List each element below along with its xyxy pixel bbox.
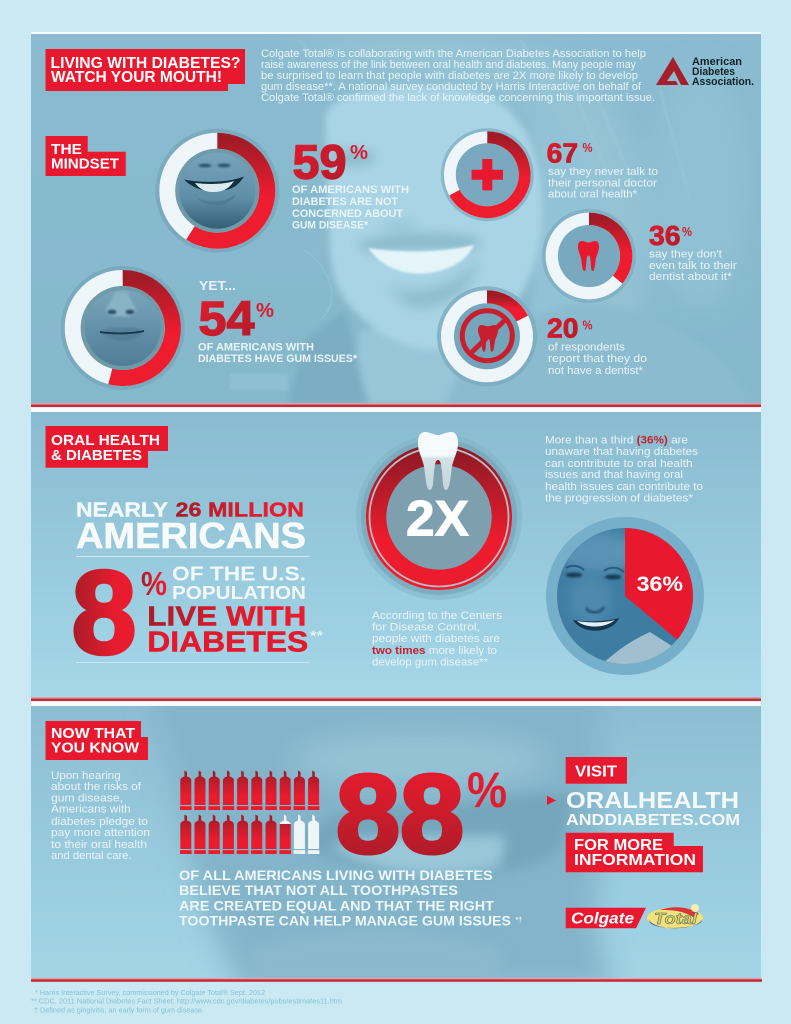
text: of all americans: BELIEVE THAT NOT ALL TOOTHPASTES [179, 882, 458, 898]
stat: 26 million americans [76, 500, 309, 557]
stat: 54 percent: OF AMERICANS WITH [198, 342, 314, 354]
stat: 8 percent live with diabetes: POPULATION [172, 582, 306, 603]
badge: 2X with tooth [356, 432, 522, 600]
text: more than a third: can contribute to oral health [545, 458, 693, 470]
panel: oral health and diabetes [31, 412, 761, 698]
footnotes: † Defined as gingivitis, an early form of gum disease. [34, 1006, 204, 1015]
text: according to the CDC: According to the Centers [372, 610, 502, 622]
icon: tooth [578, 241, 599, 271]
text: according to the CDC: two times more likely to [372, 645, 497, 657]
stat: 36 percent: % [682, 224, 692, 239]
heading: oral health and diabetes: & DIABETES [51, 448, 142, 464]
donut: 54 percent with closed mouth [61, 266, 185, 390]
icon: medical cross [472, 159, 503, 190]
stat: 59 percent: OF AMERICANS WITH [292, 184, 409, 196]
stat: 36 percent: even talk to their [649, 260, 737, 272]
text: of all americans: *† [516, 917, 522, 924]
call to action: visit website: FOR MORE [574, 837, 663, 854]
stat: 36 percent: 36 [649, 220, 680, 251]
stat: 59 percent: CONCERNED ABOUT [292, 208, 404, 220]
text: upon hearing [51, 770, 150, 862]
text: of all americans [179, 867, 522, 929]
stat: 8 percent live with diabetes: DIABETES [147, 627, 308, 659]
donut: 20 percent with no-tooth icon [437, 286, 537, 386]
text: of all americans: TOOTHPASTE CAN HELP MANAGE GUM ISSUES [179, 913, 511, 929]
footnotes: * Harris Interactive Survey, commissioned by Colgate Total® Sept. 2012 [35, 988, 265, 997]
text: upon hearing: Upon hearing [51, 770, 121, 782]
stat: 8 percent live with diabetes: 8 [72, 546, 136, 680]
stat: 67 percent [547, 138, 658, 201]
heading: the mindset [46, 136, 126, 176]
intro text block: Colgate Total® is collaborating with the American Diabetes Association to help [261, 48, 646, 60]
call to action: visit website: INFORMATION [574, 852, 696, 869]
stat: 67 percent: about oral health* [548, 189, 637, 201]
intro text block: gum disease**. A national survey conducted by Harris Interactive on behalf of [261, 81, 641, 93]
text: upon hearing: diabetes pledge to [51, 816, 148, 828]
stat: 67 percent: % [582, 140, 593, 155]
stat: 59 percent: 59 [292, 136, 346, 190]
stat: 54 percent [198, 278, 358, 365]
heading: the mindset: MINDSET [51, 157, 119, 173]
text: of all americans: OF ALL AMERICANS LIVING WITH DIABETES [179, 867, 493, 883]
heading: living with diabetes: LIVING WITH DIABETES? [50, 55, 240, 72]
stat: 20 percent: of respondents [548, 342, 625, 354]
donut: 59 percent with smiling mouth [155, 129, 279, 253]
stat: 54 percent: DIABETES HAVE GUM ISSUES* [198, 353, 358, 365]
call to action: visit website: ORALHEALTH [566, 787, 739, 813]
heading: living with diabetes [46, 49, 245, 91]
stat: 8 percent live with diabetes: ** [310, 628, 324, 643]
stat: 26 million americans: NEARLY [76, 500, 169, 522]
text: upon hearing: to their oral health [51, 839, 147, 851]
stat: 20 percent: % [582, 318, 593, 332]
footnotes [31, 988, 342, 1015]
text: more than a third: unaware that having diabetes [545, 446, 698, 458]
heading: now that you know [46, 721, 148, 760]
logo: Colgate Total [566, 904, 703, 928]
text: upon hearing: pay more attention [51, 827, 150, 839]
stat: 67 percent: 67 [547, 138, 578, 169]
text: upon hearing: and dental care. [51, 850, 132, 862]
intro text block [261, 48, 655, 104]
stat: 36 percent [649, 220, 737, 283]
stat: 88 percent: % [467, 762, 507, 818]
logo: Colgate Total: Total [654, 911, 698, 928]
text: more than a third: issues and that having oral [545, 469, 683, 481]
intro text block: raise awareness of the link between oral health and diabetes. Many people may [261, 59, 637, 71]
logo: American Diabetes Association: Association. [692, 76, 754, 88]
stat: 26 million americans: 26 MILLION [176, 500, 304, 522]
stat: 54 percent: 54 [198, 293, 255, 346]
text: more than a third: the progression of diabetes* [545, 493, 693, 505]
stat: 59 percent: DIABETES ARE NOT [292, 196, 399, 208]
stat: 8 percent live with diabetes: % [141, 565, 167, 602]
arrow [547, 796, 556, 805]
chart: toothpaste tube pictogram [180, 770, 319, 854]
stat: 59 percent [292, 136, 409, 231]
call to action: visit website [547, 757, 740, 872]
intro text block: Colgate Total® confirmed the lack of knowledge concerning this important issue. [261, 92, 655, 104]
stat: 20 percent: report that they do [548, 353, 647, 365]
text: according to the CDC: for Disease Control, [372, 622, 480, 634]
panel: the mindset [31, 32, 761, 404]
text: upon hearing: Americans with [51, 804, 131, 816]
call to action: visit website: ANDDIABETES.COM [566, 812, 740, 829]
call to action: visit website: VISIT [575, 764, 618, 781]
heading: oral health and diabetes [46, 426, 168, 468]
heading: now that you know: YOU KNOW [51, 741, 139, 757]
logo: Colgate Total: Colgate [571, 910, 634, 928]
intro text block: be surprised to learn that people with diabetes are 2X more likely to develop [261, 70, 638, 82]
stat: 36 percent: say they don't [649, 249, 722, 261]
heading: oral health and diabetes: ORAL HEALTH [51, 433, 160, 449]
text: more than a third [545, 434, 703, 505]
logo: American Diabetes Association: Diabetes [692, 66, 735, 78]
text: upon hearing: about the risks of [51, 781, 141, 793]
stat: 8 percent live with diabetes [72, 546, 324, 680]
footnotes: ** CDC, 2011 National Diabetes Fact Sheet: http://www.cdc.gov/diabetes/pubs/estimates11.htm [31, 997, 342, 1006]
stat: 59 percent: % [350, 142, 368, 164]
stat: 26 million americans: AMERICANS [76, 515, 306, 556]
pie: 36 percent with portrait: 36% [637, 573, 683, 596]
stat: 88 percent: 88 [336, 752, 464, 876]
stat: 20 percent: 20 [547, 313, 578, 344]
heading: the mindset: THE [51, 142, 82, 158]
stat: 20 percent: not have a dentist* [548, 365, 643, 377]
stat: 67 percent: say they never talk to [548, 166, 658, 178]
pie: 36 percent with portrait [546, 517, 704, 675]
logo: American Diabetes Association: American [692, 56, 742, 68]
text: more than a third: More than a third (36%) are [545, 434, 688, 446]
panel: now that you know [31, 690, 761, 990]
badge: 2X with tooth: 2X [406, 490, 469, 546]
stat: 67 percent: their personal doctor [548, 178, 658, 190]
background photo: smiling woman [232, 40, 692, 403]
donut: 67 percent with medical cross [441, 128, 534, 221]
text: according to the CDC: people with diabetes are [372, 633, 500, 645]
text: according to the CDC: develop gum disease** [372, 657, 488, 669]
stat: 54 percent: YET... [199, 278, 236, 293]
text: more than a third: health issues can contribute to [545, 481, 703, 493]
icon: tooth crossed out [462, 311, 512, 361]
icon: large white tooth [418, 432, 458, 490]
heading: living with diabetes: WATCH YOUR MOUTH! [51, 69, 222, 86]
text: of all americans: ARE CREATED EQUAL AND THAT THE RIGHT [179, 898, 494, 914]
stat: 8 percent live with diabetes: LIVE WITH [147, 601, 306, 632]
text: upon hearing: gum disease, [51, 793, 123, 805]
logo: American Diabetes Association [656, 56, 754, 88]
stat: 36 percent: dentist about it* [649, 271, 732, 283]
stat: 20 percent [547, 313, 647, 377]
heading: now that you know: NOW THAT [51, 726, 135, 742]
donut: 36 percent with tooth [542, 209, 636, 303]
background photo: blurred mouth [166, 706, 618, 978]
stat: 59 percent: GUM DISEASE* [292, 219, 369, 231]
stat: 54 percent: % [256, 300, 274, 322]
stat: 8 percent live with diabetes: OF THE U.S. [172, 564, 306, 586]
text: according to the CDC [372, 610, 502, 669]
